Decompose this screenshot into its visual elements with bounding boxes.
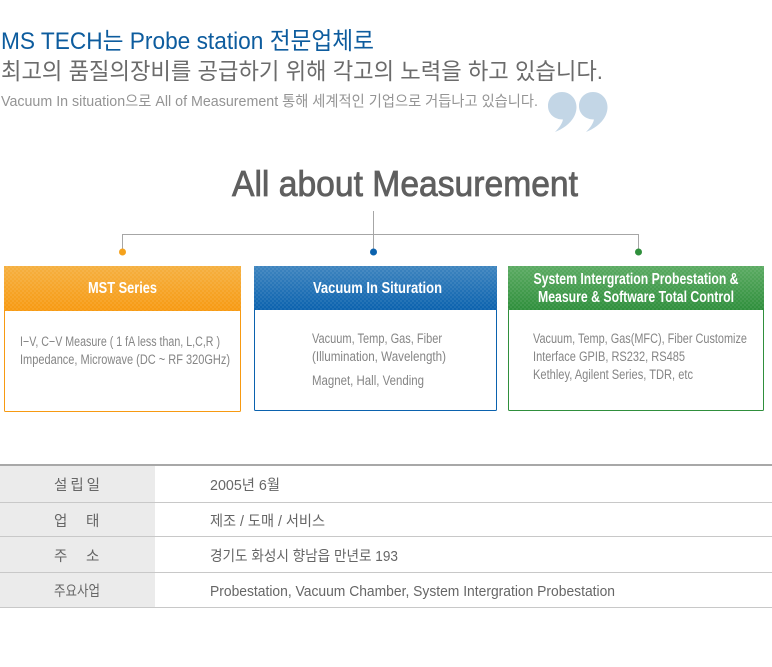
company info table [0,464,772,608]
icon: closing quotation marks [548,92,608,132]
connector dot: green [635,248,642,256]
row: address: 소 [86,549,99,565]
panel: Vacuum In Situration [254,266,497,410]
panel header: MST Series: MST Series [88,280,157,297]
row: main business: 주요사업 [54,583,100,600]
row: business type: 태 [86,513,99,530]
panel: System Integration [508,266,764,410]
row: address: 경기도 화성시 향남읍 만년로 193 [210,548,398,565]
panel: MST Series [4,266,241,412]
panel body text: Magnet, Hall, Vending [312,373,424,388]
panel body text: Interface GPIB, RS232, RS485 [533,349,685,364]
connector dot: blue [370,248,377,256]
row: founding date: 2005년 6월 [210,477,280,494]
connector tree [119,211,642,256]
panel body text: Impedance, Microwave (DC ~ RF 320GHz) [20,352,230,367]
row: main business: Probestation, Vacuum Chamber, System Intergration Probestation [210,584,615,600]
panel body text [312,331,446,388]
subheadline: 최고의 품질의장비를 공급하기 위해 각고의 노력을 하고 있습니다. [1,58,603,84]
panel header: Vacuum In Situration: Vacuum In Situration [313,280,442,297]
main heading: All about Measurement [232,163,578,204]
row: main business [54,583,615,600]
panel body text [533,331,747,382]
header text block [1,28,603,110]
row: founding date [54,477,280,494]
panel body text: Kethley, Agilent Series, TDR, etc [533,367,693,382]
row: business type [54,513,325,530]
panel header: MST Series [4,266,241,311]
row: address [54,548,398,565]
panel body text [20,334,230,367]
connector dot: orange [119,248,126,256]
panel body text: I−V, C−V Measure ( 1 fA less than, L,C,R ) [20,334,220,349]
row: address: 주 [54,549,67,565]
headline: company intro: MS TECH는 Probe station 전문업체로 [1,28,374,55]
panel header: System Integration [508,266,764,310]
supporting sentence: Vacuum In situation으로 All of Measurement 통해 세계적인 기업으로 거듭나고 있습니다. [1,93,538,110]
panel body text: Vacuum, Temp, Gas, Fiber [312,331,442,346]
panel body text: (Illumination, Wavelength) [312,349,446,364]
row: business type: 업 [54,513,67,530]
row: business type: 제조 / 도매 / 서비스 [210,513,325,530]
panel header: Vacuum In Situration [254,266,497,310]
row: founding date: 설 립 일 [54,477,100,494]
